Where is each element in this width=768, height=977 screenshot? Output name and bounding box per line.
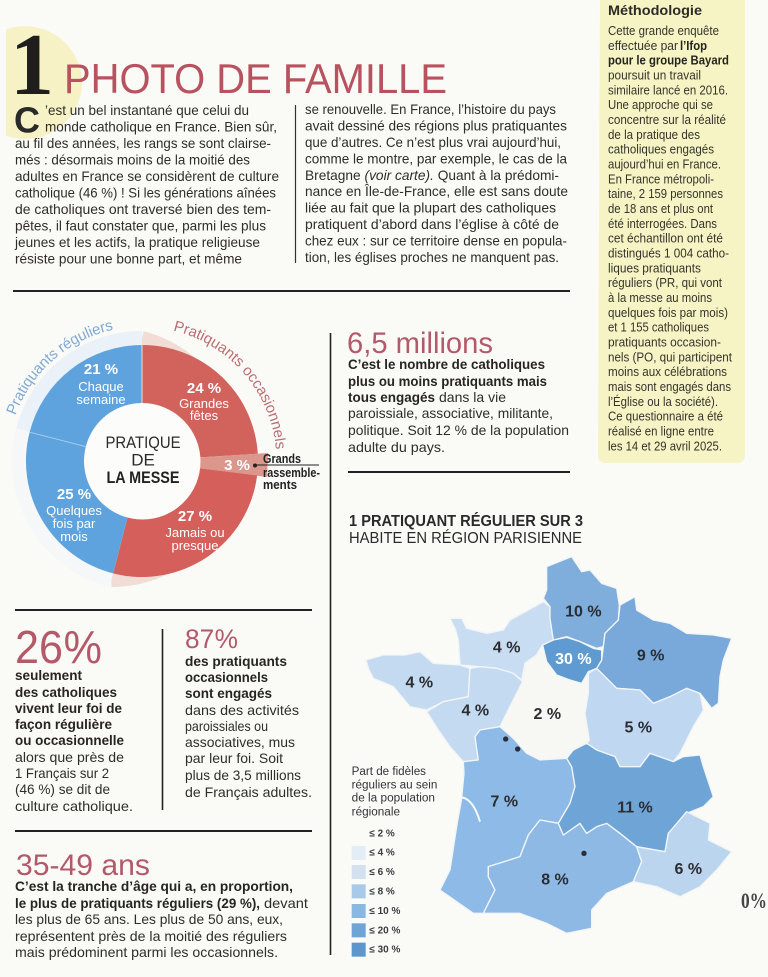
méthodologie text: moins aux célébrations	[608, 364, 727, 379]
map legend: ≤ 4 %	[369, 848, 395, 859]
méthodologie text: été interrogées. Dans	[608, 216, 717, 231]
méthodologie text: mais sont engagés dans	[608, 379, 731, 394]
map value labels: 9 %	[637, 648, 664, 665]
intro text column 1: adultes en France se considèrent de culture	[15, 168, 279, 184]
region: Nouvelle-Aquitaine	[440, 727, 575, 913]
region: Centre-Val de Loire	[500, 645, 589, 760]
méthodologie text: à la messe au moins	[608, 290, 712, 305]
map heading: HABITE EN RÉGION PARISIENNE	[349, 528, 582, 547]
center label: LA MESSE	[106, 468, 180, 487]
map legend: de la population	[352, 791, 435, 805]
méthodologie text: aujourd’hui en France.	[608, 156, 721, 172]
intro text column 1	[14, 102, 279, 266]
region: Bretagne	[366, 652, 470, 710]
slice label: 25 %: mois	[60, 529, 88, 544]
center label	[106, 433, 180, 487]
méthodologie text: de la pratique des	[608, 127, 700, 142]
méthodologie text: cet échantillon ont été	[608, 231, 723, 246]
slice label: 27 %: 27 %	[178, 508, 212, 525]
map value labels: 30 %	[555, 651, 592, 668]
map legend: ≤ 20 %	[369, 925, 400, 936]
title: PHOTO DE FAMILLE	[64, 55, 447, 102]
slice label: 3 %: 3 %	[224, 457, 250, 474]
map value labels: 8 %	[541, 871, 569, 888]
stat description: tous engagés	[348, 389, 435, 405]
méthodologie text: réguliers (PR, qui vont	[608, 275, 722, 290]
center label: PRATIQUE	[106, 433, 180, 452]
méthodologie text: pratiquants occasion-	[608, 334, 721, 350]
stat: 87 %: 87 %	[185, 624, 238, 654]
stat description: adulte du pays.	[348, 439, 445, 455]
intro text column 2: chez eux : sur ce territoire dense en popula-	[305, 232, 567, 248]
map legend: ≤ 8 %	[369, 886, 395, 897]
stat description: représentent près de la moitié des réguliers	[15, 928, 287, 944]
stat: 26 %: 26 %	[15, 621, 102, 673]
map legend: ≤ 10 %	[369, 906, 400, 917]
stat description: paroissiale, associative, militante,	[348, 405, 553, 421]
stat description: mais prédominent parmi les occasionnels.	[15, 944, 278, 960]
stat description: devant	[264, 895, 308, 911]
stat description: occasionnels	[185, 669, 268, 685]
slice label: 24 %: Grandes	[179, 396, 229, 411]
stat description: politique. Soit 12 % de la population	[348, 422, 569, 438]
stat description: associatives, mus	[185, 734, 295, 750]
panel: méthodologie	[598, 0, 745, 463]
slice label: 21 %	[76, 361, 126, 407]
méthodologie text: l’Ifop	[680, 38, 707, 53]
intro text column 2: avait dessiné des régions plus pratiquantes	[305, 118, 567, 134]
intro text column 1: catholique (46 %) ! Si les générations aînées	[15, 184, 276, 200]
arc label: pratiquants occasionnels: Pratiquants occasionnels	[174, 320, 286, 449]
region: Occitanie	[483, 820, 642, 933]
slice label: 25 %: 25 %	[57, 486, 91, 503]
intro text column 1: résiste pour une bonne part, et même	[15, 250, 242, 266]
highlighter spot	[6, 26, 82, 139]
arc label: pratiquants réguliers: Pratiquants réguliers	[6, 322, 112, 414]
region: Normandie	[450, 602, 553, 680]
callout: grands rassemblements: Grands	[263, 451, 301, 466]
region: Île-de-France	[543, 637, 602, 683]
intro text column 2: que d’autres. Ce n’est plus vrai aujourd’hui,	[305, 134, 561, 150]
slice label: 25 %: fois par	[53, 516, 96, 531]
méthodologie text: liques pratiquants	[608, 260, 701, 275]
stat description: paroissiales ou	[185, 718, 268, 734]
méthodologie text: les 14 et 29 avril 2025.	[608, 438, 722, 453]
intro text column 1: monde catholique en France. Bien sûr,	[45, 118, 277, 134]
callout: grands rassemblements	[253, 451, 320, 492]
map legend: réguliers au sein	[352, 777, 437, 791]
map value labels: 7 %	[491, 794, 518, 811]
stat description: le plus de pratiquants réguliers (29 %),	[15, 895, 260, 911]
stat description	[185, 653, 312, 800]
stat description: de Français adultes.	[185, 784, 312, 800]
stat description	[15, 667, 133, 814]
méthodologie text: catholiques engagés	[608, 142, 714, 157]
stat description: sont engagés	[185, 685, 272, 701]
map legend: ≤ 30 %	[369, 945, 400, 956]
callout: grands rassemblements: rassemble-	[263, 465, 320, 480]
stat: 35-49 ans: 35-49 ans	[16, 849, 150, 882]
méthodologie text: similaire lancé en 2016.	[608, 82, 728, 97]
map legend	[352, 764, 437, 957]
map value labels: 10 %	[565, 604, 602, 621]
intro text column 2: Bretagne (voir carte). Quant à la prédomi-	[305, 167, 559, 183]
stat description	[15, 878, 308, 960]
map of France	[352, 557, 732, 957]
intro text column 1: jeunes et les actifs, la pratique religieuse	[14, 234, 260, 250]
panel: intro section	[10, 17, 568, 266]
méthodologie heading: Méthodologie	[608, 2, 702, 18]
region: Bourgogne-Franche-Comté	[585, 668, 703, 767]
intro text column 1: més : désormais moins de la moitié des	[15, 152, 250, 168]
stat description: par leur foi. Soit	[185, 750, 283, 766]
intro text column 1: ’est un bel instantané que celui du	[45, 102, 249, 118]
intro text column 2: nance en Île-de-France, elle est sans doute	[305, 183, 568, 199]
stat description: culture catholique.	[15, 798, 133, 814]
slice label: 27 %: presque	[172, 538, 218, 553]
stat description: des pratiquants	[185, 653, 287, 669]
stat description: dans la vie	[439, 389, 506, 405]
region: Provence-Alpes-Côte d'Azur	[633, 812, 732, 897]
stat description: 1 Français sur 2	[15, 765, 109, 781]
intro text column 1: pêtes, il faut constater que, parmi les plus	[15, 218, 266, 234]
intro text column 2: tion, les églises proches ne manquent pas.	[305, 249, 559, 265]
region: Pays de la Loire	[427, 667, 523, 762]
méthodologie text: et 1 155 catholiques	[608, 320, 709, 335]
map value labels: 4 %	[406, 675, 433, 692]
map heading: 1 PRATIQUANT RÉGULIER SUR 3	[349, 511, 583, 530]
méthodologie text: nels (PO, qui participent	[608, 349, 732, 364]
slice label: 21 %: semaine	[76, 392, 126, 407]
méthodologie text: Ce questionnaire a été	[608, 409, 723, 424]
méthodologie text	[608, 23, 732, 453]
méthodologie text: En France métropoli-	[608, 171, 714, 186]
slice label: 24 %: 24 %	[187, 380, 221, 397]
map legend: régionale	[352, 805, 400, 819]
map value labels: 11 %	[617, 799, 653, 816]
stat description: les plus de 65 ans. Les plus de 50 ans, eux,	[15, 911, 283, 927]
region: Auvergne-Rhône-Alpes	[558, 743, 713, 852]
intro text column 2: liée au fait que la plupart des catholiques	[305, 200, 556, 216]
panel: 26 %	[15, 621, 133, 814]
map value labels: 5 %	[625, 720, 652, 737]
panel: 87 %	[185, 624, 312, 800]
slice label: 21 %: Chaque	[78, 379, 124, 394]
slice label: 27 %: Jamais ou	[165, 525, 225, 540]
stat description: C’est le nombre de catholiques	[348, 356, 545, 372]
map legend: ≤ 6 %	[369, 867, 395, 878]
méthodologie text: concentre sur la réalité	[608, 112, 726, 127]
stat description: C’est la tranche d’âge qui a, en proportion,	[15, 878, 293, 894]
stat description: (46 %) se dit de	[15, 781, 110, 797]
méthodologie text: Une approche qui se	[608, 97, 713, 112]
stat description: vivent leur foi de	[15, 700, 122, 716]
callout: grands rassemblements: ments	[263, 477, 297, 492]
map legend: Part de fidèles	[352, 764, 426, 778]
map value labels	[406, 604, 702, 888]
region: Grand Est	[597, 597, 732, 708]
stat description: des catholiques	[15, 684, 117, 700]
map value labels: 6 %	[675, 861, 702, 878]
slice label: 27 %	[165, 508, 225, 553]
map value labels: 4 %	[462, 703, 489, 720]
slice label: 21 %: 21 %	[84, 361, 118, 378]
slice label: 25 %	[46, 486, 102, 544]
donut chart: pratique de la messe	[6, 320, 320, 587]
intro text column 2: comme le montre, par exemple, le cas de la	[305, 150, 567, 166]
map heading	[349, 511, 583, 547]
intro text column 2: se renouvelle. En France, l’histoire du pays	[305, 101, 556, 117]
panel: 6,5 millions	[347, 327, 569, 455]
méthodologie text: Cette grande enquête	[608, 23, 719, 38]
slice label: 24 %	[179, 380, 229, 423]
stat description: ou occasionnelle	[15, 732, 124, 748]
méthodologie text: effectuée par	[608, 38, 679, 53]
map value labels: 2 %	[534, 706, 561, 723]
méthodologie text: taine, 2 159 personnes	[608, 186, 723, 201]
stat description: façon régulière	[15, 716, 112, 732]
slice label: 25 %: Quelques	[46, 503, 102, 518]
méthodologie text: pour le groupe Bayard	[608, 53, 729, 68]
map legend: ≤ 2 %	[369, 829, 395, 840]
slice label: 24 %: fêtes	[190, 408, 219, 423]
intro text column 2	[305, 101, 568, 265]
section number: 1	[10, 17, 54, 114]
stat description: alors que près de	[15, 749, 124, 765]
stat: 6,5 millions: 6,5 millions	[347, 327, 493, 360]
stat description: dans des activités	[185, 702, 299, 718]
méthodologie text: poursuit un travail	[608, 68, 701, 82]
intro text column 1: de catholiques ont traversé bien des tem-	[15, 201, 271, 217]
intro text column 1: au fil des années, les rangs se sont clairse-	[15, 135, 271, 151]
drop cap: C	[14, 100, 40, 140]
méthodologie text: l’Église ou la société).	[608, 394, 718, 409]
panel: 35-49 ans	[15, 849, 308, 960]
region: Hauts-de-France	[543, 557, 619, 648]
méthodologie text: quelques fois par mois)	[608, 305, 728, 320]
stat description: plus de 3,5 millions	[185, 767, 301, 783]
stat description	[348, 356, 569, 455]
méthodologie text: réalisé en ligne entre	[608, 424, 714, 438]
stat description: seulement	[15, 667, 82, 683]
center label: DE	[131, 450, 155, 470]
méthodologie text: de 18 ans et plus ont	[608, 201, 713, 216]
méthodologie text: distingués 1 004 catho-	[608, 246, 729, 260]
stat description: plus ou moins pratiquants mais	[348, 373, 547, 389]
map value labels: 4 %	[493, 640, 520, 657]
intro text column 2: pratiquent d’abord dans l’église à côté de	[305, 216, 559, 232]
